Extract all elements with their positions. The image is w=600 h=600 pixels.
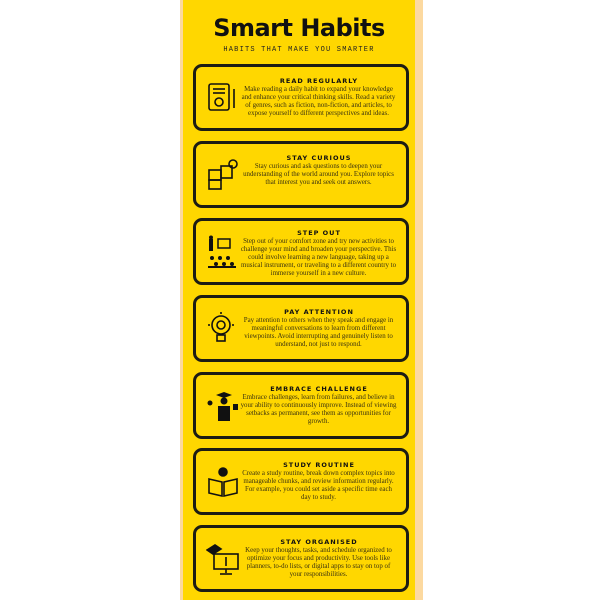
heading: READ REGULARLY [280,77,358,85]
icon: book bulb [208,467,238,497]
body text: Keep your thoughts, tasks, and schedule organized to optimize your focus and productivity. Use tools like planners, to-do lists, or digital apps to stay on top of your responsibilities. [245,547,392,578]
icon: bulb gear [208,312,234,342]
subtitle: HABITS THAT MAKE YOU SMARTER [223,46,375,54]
heading: STEP OUT [297,229,341,237]
panel: pay attention [193,295,409,362]
panel: study routine [193,448,409,515]
panel: step out [193,218,409,285]
heading: STAY CURIOUS [287,154,351,162]
icon: presenter [208,236,236,268]
icon: puzzle [208,159,238,190]
panel: read regularly [193,64,409,131]
panel: stay organised [193,525,409,592]
body text: Make reading a daily habit to expand your knowledge and enhance your critical thinking skills. Read a variety of genres, such as fiction, non-fiction, and articles, to expose yourself to different perspectives and ideas. [242,86,395,117]
body text: Embrace challenges, learn from failures, and believe in your ability to continuously improve. Instead of viewing setbacks as permanent, see them as opportunities for growth. [241,394,396,425]
heading: STUDY ROUTINE [283,461,355,469]
body text: Pay attention to others when they speak and engage in meaningful conversations to learn from different viewpoints. Avoid interrupting and genuinely listen to understand, not just to respond. [244,317,393,348]
heading: STAY ORGANISED [280,538,358,546]
body text: Create a study routine, break down complex topics into manageable chunks, and review information regularly. For example, you could set aside a specific time each day to study. [242,470,395,501]
icon: graduate [208,392,238,421]
heading: PAY ATTENTION [284,308,354,316]
title: Smart Habits [213,14,385,42]
body text: Stay curious and ask questions to deepen your understanding of the world around you. Explore topics that interest you and seek out answers. [243,163,394,186]
body text: Step out of your comfort zone and try new activities to challenge your mind and broaden your perspective. This could involve learning a new language, taking up a musical instrument, or traveling to a different country to immerse yourself in a new culture. [241,238,396,277]
icon: document gear [208,83,235,111]
panel: embrace challenge [193,372,409,439]
icon: monitor cap [206,544,239,575]
panel: stay curious [193,141,409,208]
heading: EMBRACE CHALLENGE [270,385,368,393]
